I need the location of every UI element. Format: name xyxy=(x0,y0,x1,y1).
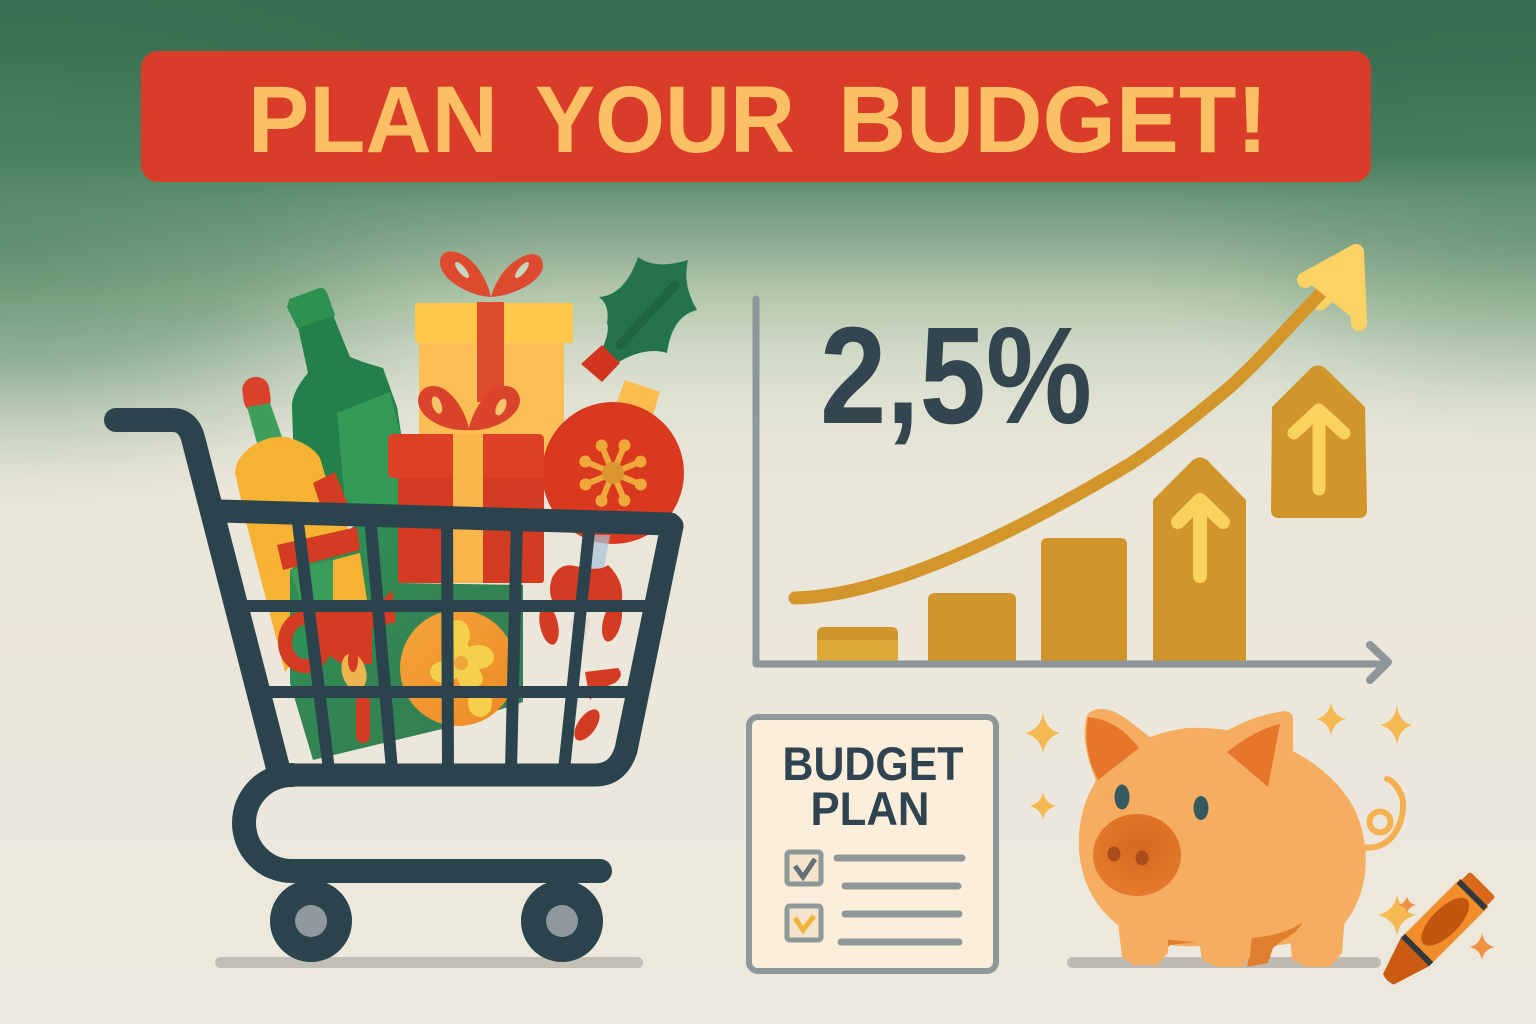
belly shading xyxy=(1118,925,1197,953)
axes xyxy=(756,299,1388,680)
nostrils xyxy=(1108,846,1120,862)
bar arrow 2 xyxy=(1294,410,1344,489)
pig shadow xyxy=(1067,957,1381,968)
checklist item 1 xyxy=(787,852,962,886)
ears outer xyxy=(1085,709,1160,790)
red gift xyxy=(388,386,544,583)
title banner: YOUR xyxy=(535,67,795,173)
candy ribbon shapes xyxy=(536,535,626,745)
bars xyxy=(817,366,1367,661)
tail xyxy=(1362,779,1403,848)
title banner: PLAN xyxy=(248,67,498,173)
red ribbon knot xyxy=(285,590,396,743)
growth chart xyxy=(756,252,1388,680)
red ornament xyxy=(542,380,684,544)
snout xyxy=(1093,814,1181,896)
card heading xyxy=(782,737,964,835)
cart wheel right xyxy=(521,880,603,962)
piggy bank xyxy=(1067,709,1403,968)
bar arrow 1 xyxy=(1178,500,1223,576)
cart wheel left xyxy=(270,880,352,962)
small orange sparkles xyxy=(1398,896,1495,960)
cart frame xyxy=(116,420,672,871)
red gift bow xyxy=(418,386,520,430)
cart shadow xyxy=(215,957,643,968)
title banner: BUDGET! xyxy=(838,67,1268,173)
checklist item 2 xyxy=(787,906,959,942)
title banner xyxy=(141,51,1371,182)
legs xyxy=(1118,923,1168,965)
body xyxy=(1079,728,1366,948)
green bottle xyxy=(288,289,402,525)
budget plan card xyxy=(749,717,996,971)
card heading: PLAN xyxy=(810,782,930,835)
eyes xyxy=(1114,784,1130,810)
growth curve arrow xyxy=(795,252,1359,598)
percentage label: 2,5% xyxy=(820,299,1092,453)
crayon xyxy=(1373,870,1497,994)
inner ears xyxy=(1086,717,1139,780)
card heading: BUDGET xyxy=(782,737,964,790)
holly leaf xyxy=(581,257,697,382)
shopping cart with gifts xyxy=(116,251,697,968)
orange ornament xyxy=(400,610,516,726)
yellow gift xyxy=(415,251,573,463)
yellow bottle xyxy=(235,375,385,672)
sparkles xyxy=(1025,702,1416,935)
ribbon and small box xyxy=(277,472,367,600)
big green box inside cart xyxy=(290,520,523,760)
top bow xyxy=(440,251,543,297)
